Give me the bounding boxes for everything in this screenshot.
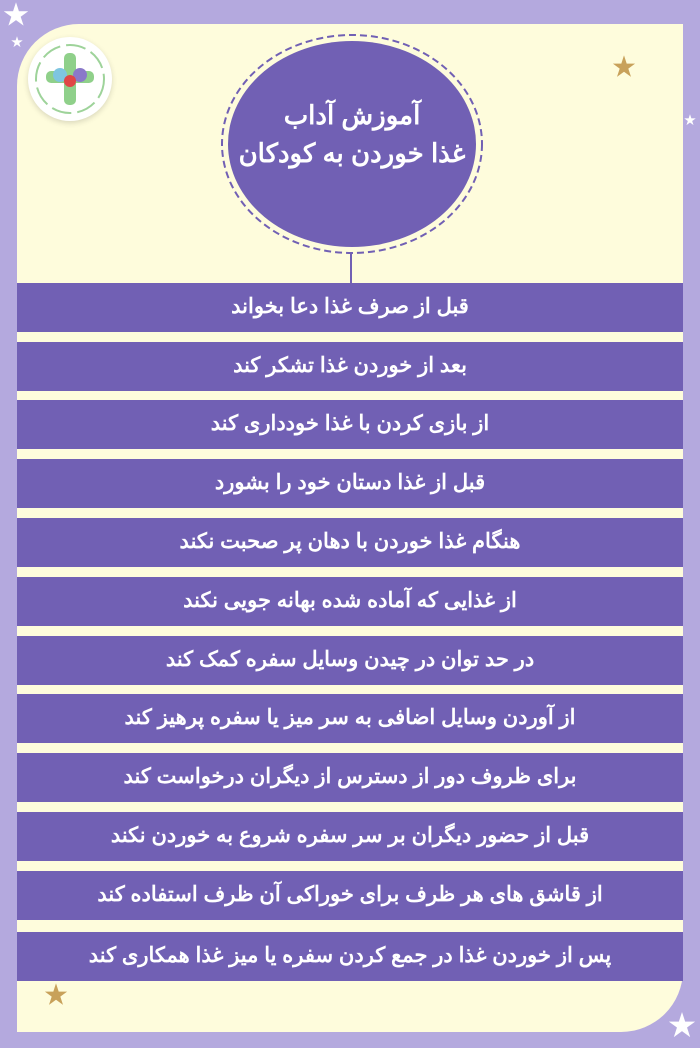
bar 11 bbox=[17, 871, 683, 920]
bar 8 bbox=[17, 694, 683, 743]
bar 7 bbox=[17, 636, 683, 685]
title circle bbox=[221, 34, 483, 254]
icon: gold star bottom: ★ bbox=[44, 982, 68, 1009]
logo bbox=[28, 37, 112, 121]
bar 1: قبل از صرف غذا دعا بخواند bbox=[231, 295, 469, 318]
icon: small star left: ★ bbox=[11, 35, 23, 49]
icon: star top-left: ★ bbox=[3, 0, 29, 30]
bar 6 bbox=[17, 577, 683, 626]
title: آموزش آداب bbox=[284, 100, 420, 130]
bar 3 bbox=[17, 400, 683, 449]
icon: small star right: ★ bbox=[684, 113, 696, 127]
bar 6: از غذایی که آماده شده بهانه جویی نکند bbox=[183, 589, 517, 612]
bar 1 bbox=[17, 283, 683, 332]
bar 10 bbox=[17, 812, 683, 861]
bar 7: در حد توان در چیدن وسایل سفره کمک کند bbox=[166, 648, 534, 671]
title bbox=[239, 98, 466, 169]
bar 5 bbox=[17, 518, 683, 567]
title: غذا خوردن به کودکان bbox=[239, 138, 465, 168]
bar 4 bbox=[17, 459, 683, 508]
connector line bbox=[350, 254, 352, 284]
bar 2 bbox=[17, 342, 683, 391]
bar 4: قبل از غذا دستان خود را بشورد bbox=[215, 471, 485, 494]
bar 5: هنگام غذا خوردن با دهان پر صحبت نکند bbox=[180, 530, 520, 553]
bar 12: پس از خوردن غذا در جمع کردن سفره یا میز غذا همکاری کند bbox=[89, 944, 611, 967]
bar 9: برای ظروف دور از دسترس از دیگران درخواست کند bbox=[123, 765, 577, 788]
bar 10: قبل از حضور دیگران بر سر سفره شروع به خوردن نکند bbox=[111, 824, 589, 847]
bar 12 bbox=[17, 932, 683, 981]
bar 2: بعد از خوردن غذا تشکر کند bbox=[233, 354, 467, 377]
bar 8: از آوردن وسایل اضافی به سر میز یا سفره پرهیز کند bbox=[124, 706, 576, 729]
bar 3: از بازی کردن با غذا خودداری کند bbox=[211, 412, 489, 435]
icon: gold star top: ★ bbox=[612, 54, 636, 81]
bar 9 bbox=[17, 753, 683, 802]
icon: star bottom-right: ★ bbox=[668, 1010, 696, 1041]
bar 11: از قاشق های هر ظرف برای خوراکی آن ظرف استفاده کند bbox=[97, 883, 603, 906]
